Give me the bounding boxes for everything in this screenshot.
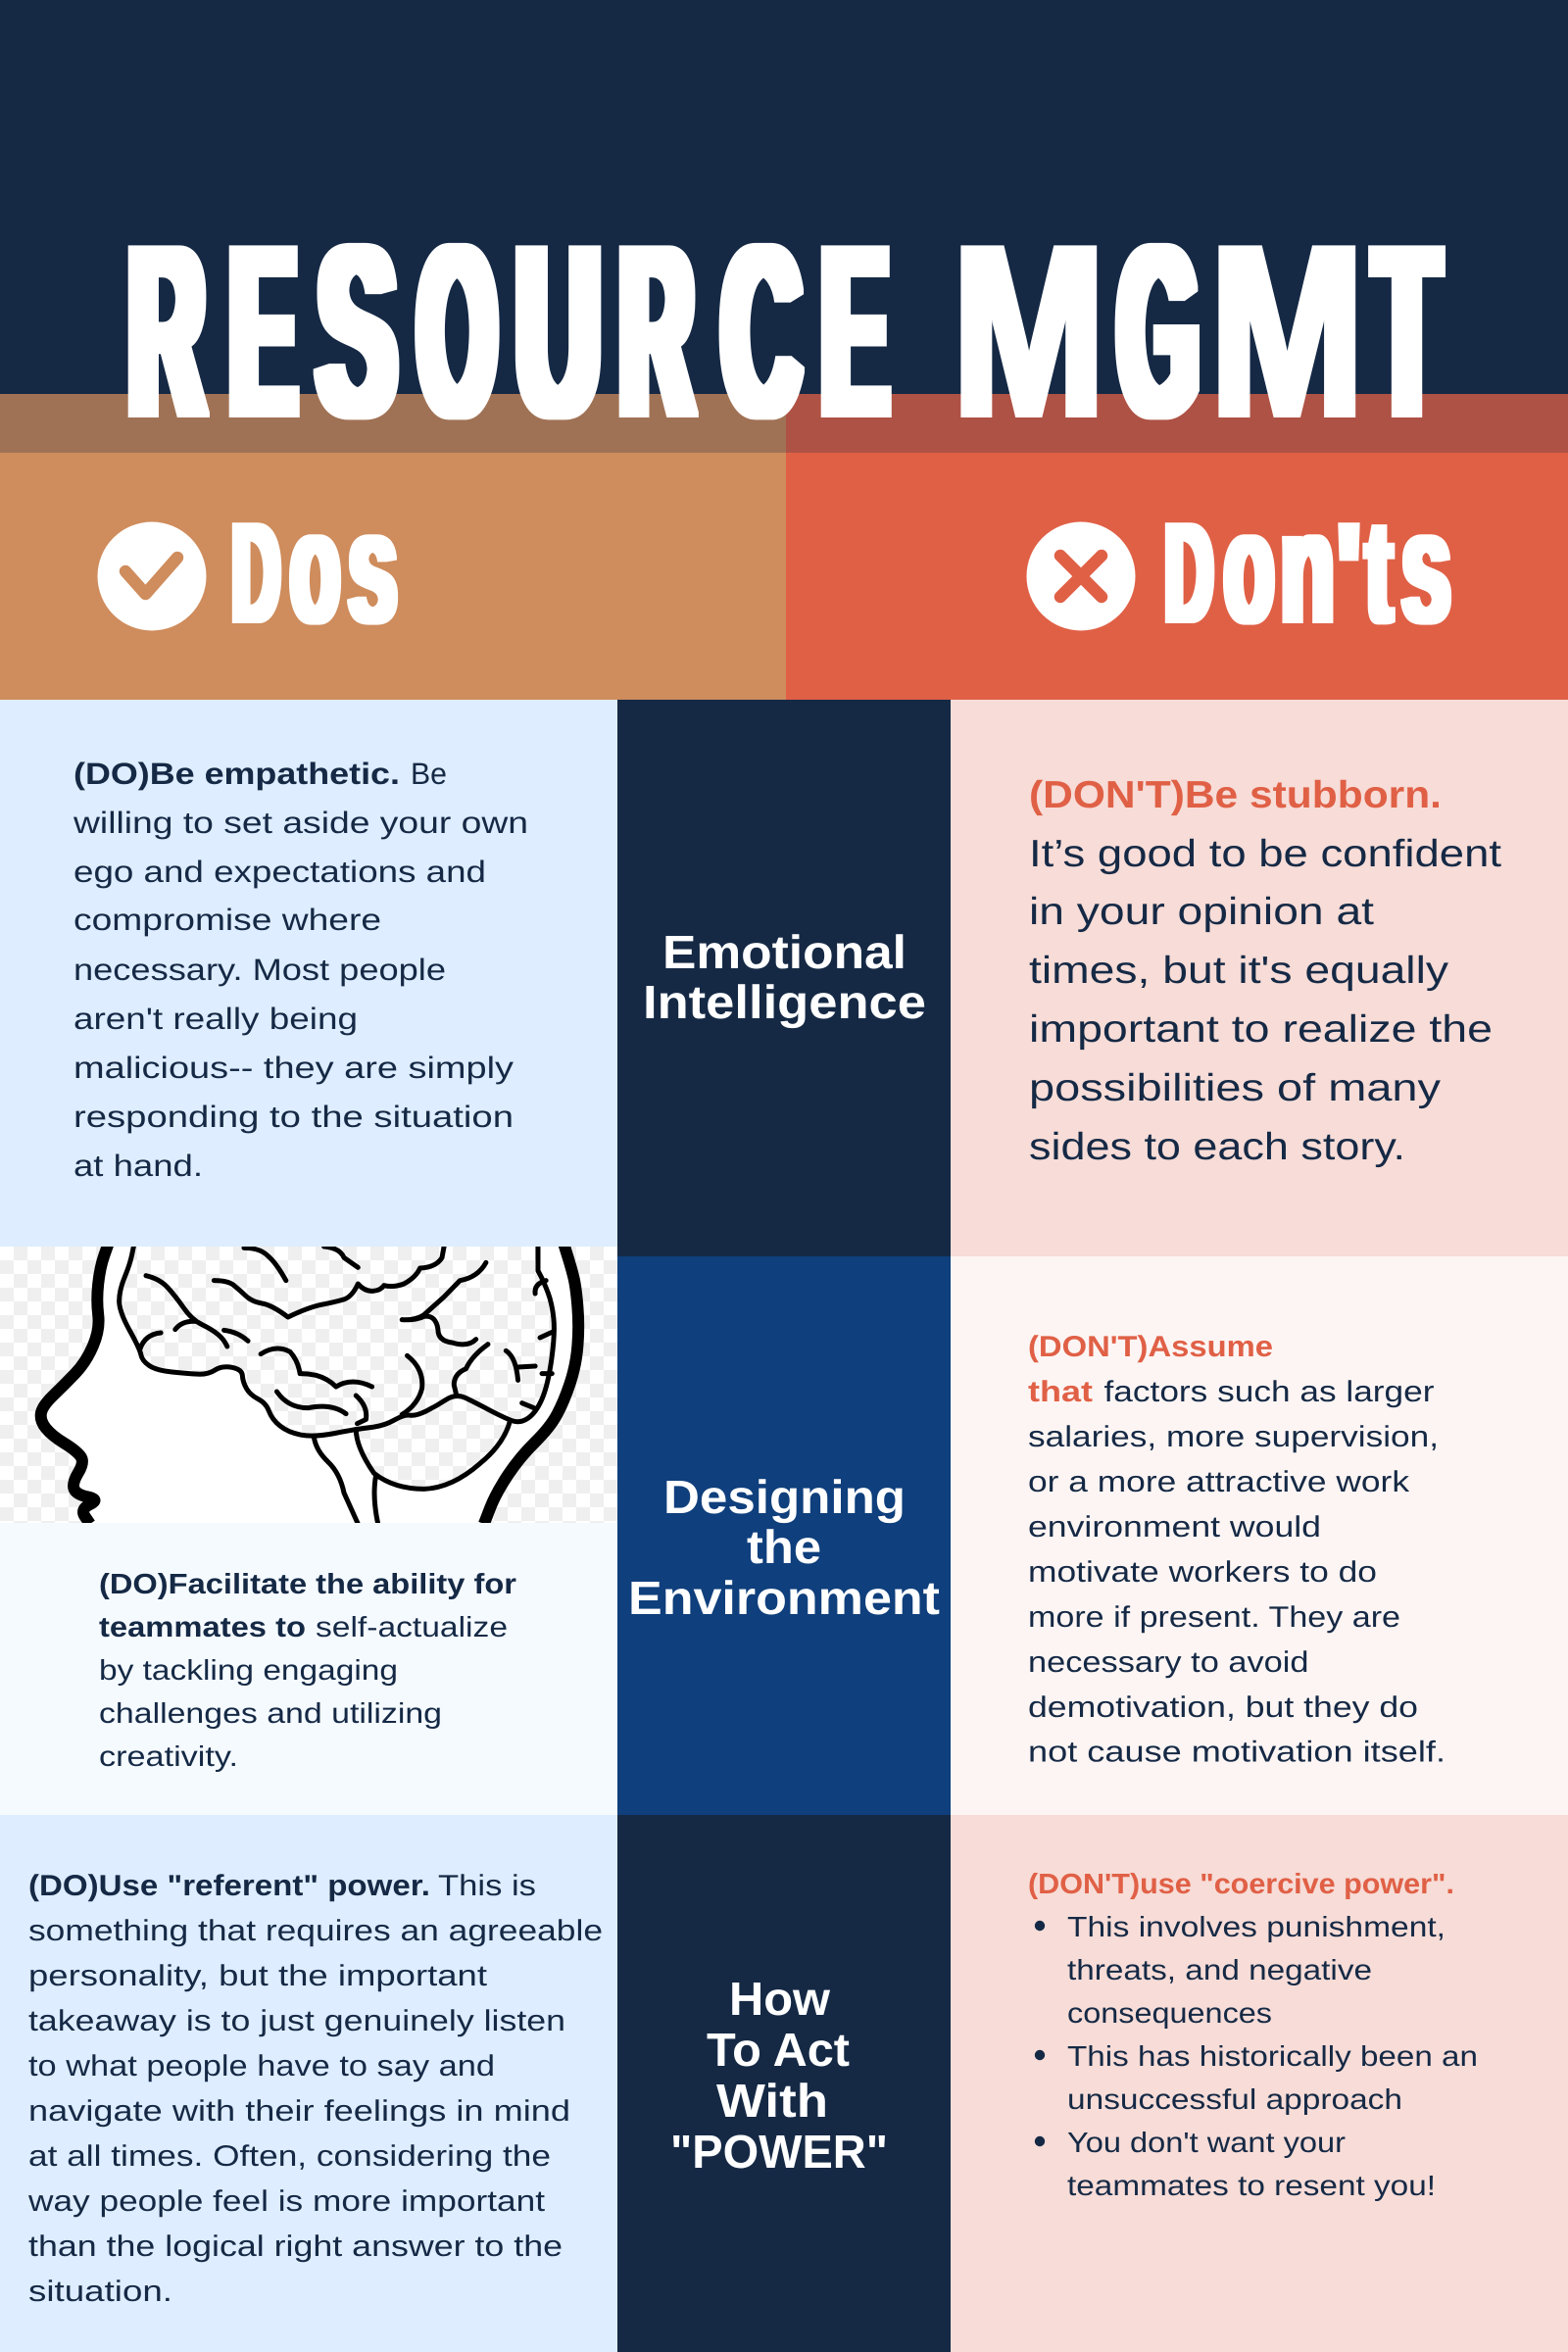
- panel: Designing the Environment label: [617, 1256, 951, 1815]
- panel: How To Act With POWER label: To Act: [707, 2025, 850, 2077]
- panel: Don'ts header: [786, 453, 1568, 700]
- title: [129, 194, 1439, 466]
- bullet list: This has historically been an: [1067, 2041, 1478, 2073]
- title: U: [516, 194, 601, 466]
- header background: [0, 0, 1568, 394]
- panel: Do be empathetic: Be: [411, 757, 447, 791]
- panel: Do be empathetic: (DO)Be empathetic.: [74, 757, 400, 791]
- panel: Do use referent power: to what people have to say and: [28, 2050, 495, 2082]
- bullet list: consequences: [1067, 1998, 1272, 2030]
- panel: Do facilitate: by tackling engaging: [99, 1655, 398, 1687]
- panel: Don't be stubborn: times, but it's equally: [1029, 950, 1449, 992]
- panel: How To Act With POWER label: How: [729, 1974, 831, 2026]
- title: R: [129, 194, 204, 466]
- bullet list: teammates to resent you!: [1067, 2171, 1436, 2202]
- panel: Do facilitate: self-actualize: [316, 1612, 508, 1643]
- panel: Don't be stubborn: sides to each story.: [1029, 1126, 1405, 1168]
- heading: Dos: s: [348, 476, 397, 657]
- panel: Designing the Environment label: the: [747, 1522, 821, 1574]
- bullet list: This involves punishment,: [1067, 1912, 1446, 1943]
- panel: Don't be stubborn: It’s good to be confident: [1029, 833, 1501, 875]
- heading: Don'ts: s: [1401, 476, 1450, 657]
- panel: Do use referent power: personality, but the important: [28, 1960, 488, 1992]
- panel: Do be empathetic: malicious-- they are simply: [74, 1051, 514, 1085]
- band: darker orange overlap: [0, 394, 786, 453]
- panel: Don't be stubborn: (DON'T)Be stubborn.: [1029, 774, 1442, 816]
- title: M: [953, 194, 1105, 466]
- title: E: [822, 194, 888, 466]
- panel: Don't use coercive power: [951, 1815, 1568, 2352]
- panel: Do be empathetic: [0, 700, 617, 1247]
- title: E: [230, 194, 296, 466]
- icon: cross in circle: [1027, 521, 1135, 631]
- panel: Don't assume: [951, 1256, 1568, 1815]
- panel: Do use referent power: [0, 1815, 617, 2352]
- band: darker red overlap: [786, 394, 1568, 453]
- panel: Do be empathetic: aren't really being: [74, 1002, 358, 1036]
- panel: How To Act With POWER label: "POWER": [670, 2127, 888, 2179]
- panel: Don't be stubborn: important to realize the: [1029, 1008, 1493, 1051]
- panel: Don't use coercive power: (DON'T)use "coercive power".: [1028, 1869, 1454, 1900]
- panel: Don't assume: not cause motivation itself.: [1028, 1737, 1446, 1768]
- panel: Do be empathetic: necessary. Most people: [74, 953, 446, 987]
- heading: Don'ts: D: [1165, 494, 1213, 653]
- panel: Don't assume: motivate workers to do: [1028, 1556, 1377, 1589]
- text: T: [1375, 194, 1439, 466]
- bullet list: threats, and negative: [1067, 1955, 1372, 1986]
- heading: Don'ts: t: [1366, 488, 1392, 653]
- panel: Do use referent power: than the logical right answer to the: [28, 2230, 563, 2263]
- panel: Don't assume: salaries, more supervision,: [1028, 1421, 1439, 1453]
- panel: Do use referent power: at all times. Often, considering the: [28, 2140, 551, 2173]
- panel: Designing the Environment label: Designing: [663, 1472, 906, 1524]
- panel: Do be empathetic: ego and expectations and: [74, 855, 486, 889]
- panel: Don't be stubborn: possibilities of many: [1029, 1067, 1442, 1109]
- title: G: [1118, 194, 1198, 466]
- panel: Designing the Environment label: Environment: [628, 1573, 940, 1625]
- heading: Dos: o: [290, 476, 340, 657]
- panel: Don't assume: necessary to avoid: [1028, 1646, 1309, 1679]
- title: R: [620, 194, 693, 466]
- panel: Do use referent power: navigate with their feelings in mind: [28, 2095, 570, 2128]
- panel: Do be empathetic: at hand.: [74, 1149, 203, 1183]
- title: O: [418, 194, 496, 466]
- panel: Don't assume: (DON'T)Assume: [1028, 1331, 1273, 1363]
- panel: How To Act With POWER label: With: [716, 2076, 828, 2128]
- icon: check mark in circle: [98, 521, 206, 631]
- heading: Don'ts: n: [1281, 476, 1335, 657]
- panel: Do use referent power: This is: [438, 1870, 536, 1902]
- panel: Do facilitate: challenges and utilizing: [99, 1698, 442, 1730]
- title: S: [318, 194, 396, 466]
- panel: Do use referent power: way people feel is more important: [27, 2185, 546, 2218]
- panel: How To Act With POWER label: [617, 1815, 951, 2352]
- panel: Do be empathetic: responding to the situation: [74, 1100, 514, 1134]
- title: M: [1210, 194, 1364, 466]
- panel: Don't assume: that: [1028, 1376, 1093, 1408]
- panel: Don't be stubborn: [951, 700, 1568, 1256]
- title: C: [722, 194, 800, 466]
- panel: Do facilitate: (DO)Facilitate the ability for: [99, 1569, 516, 1600]
- panel: Do facilitate: creativity.: [99, 1741, 238, 1773]
- panel: Don't assume: more if present. They are: [1028, 1601, 1400, 1634]
- panel: Do facilitate: [0, 1523, 617, 1815]
- panel: Do use referent power: takeaway is to just genuinely listen: [28, 2005, 565, 2037]
- panel: Do use referent power: (DO)Use "referent" power.: [28, 1870, 430, 1902]
- panel: Emotional Intelligence label: [617, 700, 951, 1256]
- heading: Don'ts: o: [1224, 476, 1274, 657]
- panel: Don't be stubborn: in your opinion at: [1029, 891, 1374, 933]
- panel: Do use referent power: something that requires an agreeable: [28, 1915, 603, 1947]
- panel: Do facilitate: teammates to: [99, 1612, 306, 1643]
- panel: Emotional Intelligence label: Intelligence: [643, 977, 926, 1029]
- panel: Dos header: [0, 453, 786, 700]
- panel: Do use referent power: situation.: [28, 2276, 172, 2308]
- bullet list: unsuccessful approach: [1067, 2084, 1402, 2116]
- panel: Do be empathetic: compromise where: [74, 903, 381, 937]
- heading: Don'ts: ': [1337, 494, 1360, 653]
- panel: Don't assume: environment would: [1028, 1511, 1321, 1544]
- bullet list: [1035, 1912, 1478, 2202]
- panel: Do be empathetic: willing to set aside your own: [73, 806, 528, 840]
- panel: Emotional Intelligence label: Emotional: [662, 927, 906, 979]
- panel: Don't assume: demotivation, but they do: [1028, 1691, 1418, 1724]
- panel: Don't assume: or a more attractive work: [1028, 1466, 1410, 1498]
- panel: Don't assume: factors such as larger: [1103, 1376, 1435, 1408]
- bullet list: You don't want your: [1067, 2128, 1346, 2159]
- panel: brain illustration: [0, 1245, 617, 1526]
- heading: Dos: D: [232, 494, 280, 653]
